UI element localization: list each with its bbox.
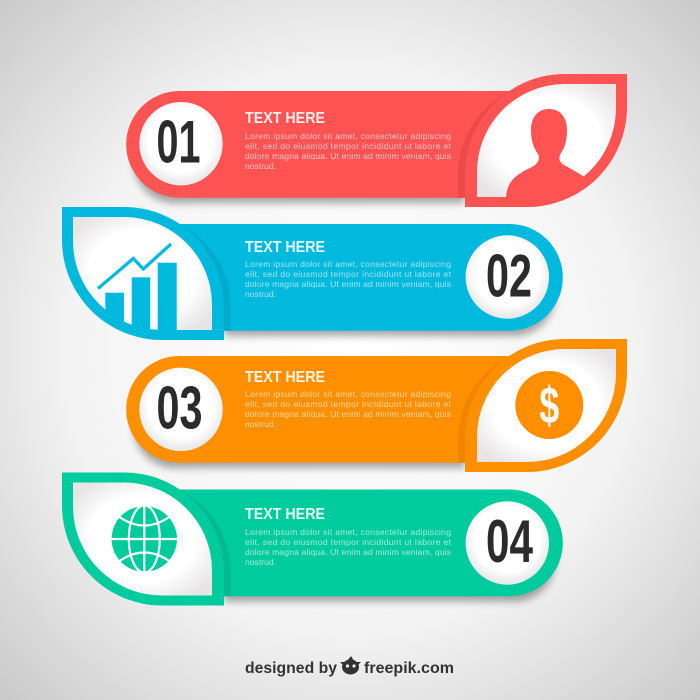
body text (245, 527, 452, 567)
panel: banner 04 green (62, 472, 563, 606)
leaf frame (465, 339, 627, 472)
body text: Lorem ipsum dolor sit amet, consectetur adipiscing (245, 389, 451, 399)
panel: banner 02 blue (62, 207, 563, 340)
leaf interior (477, 84, 616, 197)
body text: nostrud. (245, 419, 276, 429)
ribbon bar (126, 356, 520, 463)
leaf interior (73, 482, 212, 596)
body text: Lorem ipsum dolor sit amet, consectetur adipiscing (245, 527, 451, 537)
body text: dolore magna aliqua. Ut enim ad minim veniam, quis (245, 151, 451, 161)
text: designed by: designed by (245, 660, 337, 677)
body text: elit, sed do eiusmod tempor incididunt ut labore et (245, 269, 452, 279)
number circle (466, 235, 549, 319)
body text: nostrud. (245, 557, 276, 567)
ribbon bar (169, 224, 563, 331)
leaf frame (62, 207, 224, 340)
body text: dolore magna aliqua. Ut enim ad minim veniam, quis (245, 547, 451, 557)
number 02: 02 (486, 242, 532, 310)
icon: person silhouette (506, 109, 586, 197)
body text: Lorem ipsum dolor sit amet, consectetur adipiscing (245, 131, 451, 141)
panel: banner 03 orange (126, 339, 627, 472)
leaf interior (477, 349, 616, 462)
footer credit (245, 656, 454, 677)
body text: nostrud. (245, 161, 276, 171)
icon: freepik logo (340, 656, 361, 674)
icon: globe (110, 505, 179, 573)
body text: dolore magna aliqua. Ut enim ad minim veniam, quis (245, 409, 451, 419)
number 03: 03 (156, 374, 202, 442)
body text: elit, sed do eiusmod tempor incididunt ut labore et (245, 537, 452, 547)
number circle (139, 102, 223, 185)
ribbon bar (169, 490, 563, 596)
heading: TEXT HERE (245, 369, 325, 386)
number 04: 04 (486, 508, 533, 575)
body text: elit, sed do eiusmod tempor incididunt ut labore et (245, 399, 452, 409)
number circle (466, 501, 549, 585)
body text: nostrud. (245, 289, 276, 299)
body text: dolore magna aliqua. Ut enim ad minim veniam, quis (245, 279, 451, 289)
heading: TEXT HERE (245, 239, 325, 256)
heading: TEXT HERE (245, 506, 325, 523)
number 01: 01 (156, 109, 200, 176)
icon: bar chart with trend line (98, 244, 177, 333)
body text (245, 389, 452, 429)
text: freepik.com: freepik.com (364, 660, 454, 677)
body text (245, 131, 452, 171)
icon: dollar coin (515, 371, 583, 439)
body text (245, 259, 452, 299)
body text: elit, sed do eiusmod tempor incididunt ut labore et (245, 141, 452, 151)
ribbon bar (126, 91, 520, 198)
icon: dollar coin: $ (539, 375, 559, 435)
panel: banner 01 red (126, 74, 627, 207)
leaf interior (73, 217, 212, 330)
number circle (139, 368, 223, 451)
heading: TEXT HERE (245, 110, 325, 127)
body text: Lorem ipsum dolor sit amet, consectetur adipiscing (245, 259, 451, 269)
leaf frame (62, 472, 224, 606)
leaf frame (465, 74, 627, 207)
